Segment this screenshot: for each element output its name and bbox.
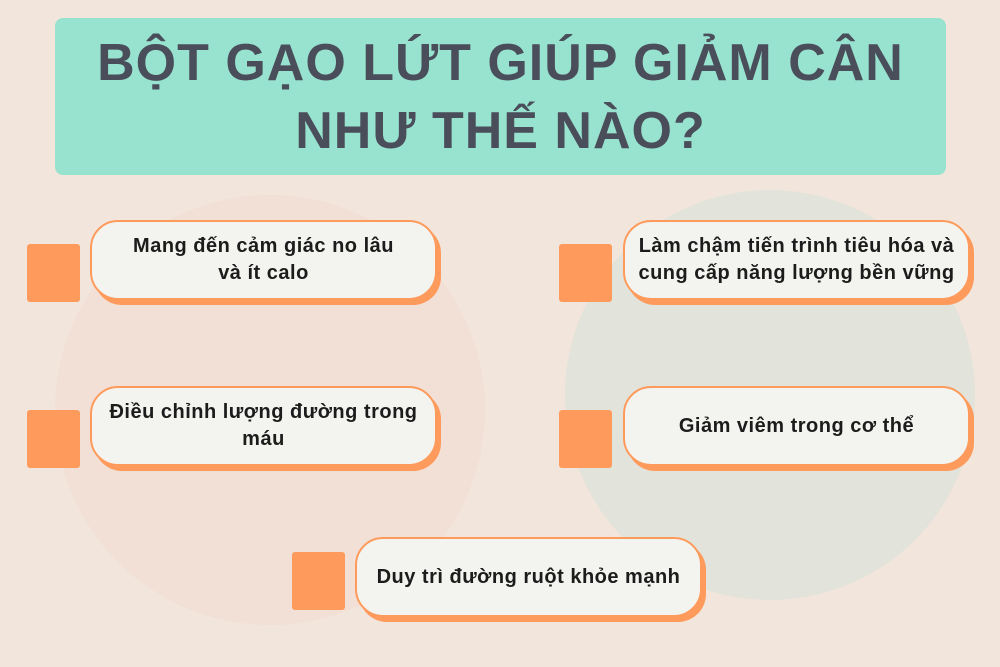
title [55, 18, 946, 175]
item 5 [292, 537, 706, 622]
icon: square [292, 552, 345, 610]
card text: Làm chậm tiến trình tiêu hóa và [639, 235, 954, 257]
card text: Duy trì đường ruột khỏe mạnh [377, 566, 680, 588]
card text [623, 386, 970, 466]
icon: square [27, 410, 80, 468]
card text [623, 220, 970, 300]
card text [90, 220, 437, 300]
item 1 [27, 220, 441, 305]
icon: square [27, 244, 80, 302]
icon: square [559, 244, 612, 302]
card text: máu [242, 428, 285, 450]
item 4 [559, 386, 974, 471]
card text: và ít calo [218, 262, 309, 284]
card text [90, 386, 437, 466]
card text: Giảm viêm trong cơ thể [679, 414, 914, 436]
item 2 [559, 220, 974, 305]
card text: Mang đến cảm giác no lâu [133, 235, 394, 257]
card text: cung cấp năng lượng bền vững [638, 262, 955, 284]
title: BỘT GẠO LỨT GIÚP GIẢM CÂN [97, 34, 904, 92]
icon: square [559, 410, 612, 468]
title: NHƯ THẾ NÀO? [295, 102, 706, 160]
card text: Điều chỉnh lượng đường trong [109, 401, 418, 423]
card text [355, 537, 702, 617]
item 3 [27, 386, 441, 471]
